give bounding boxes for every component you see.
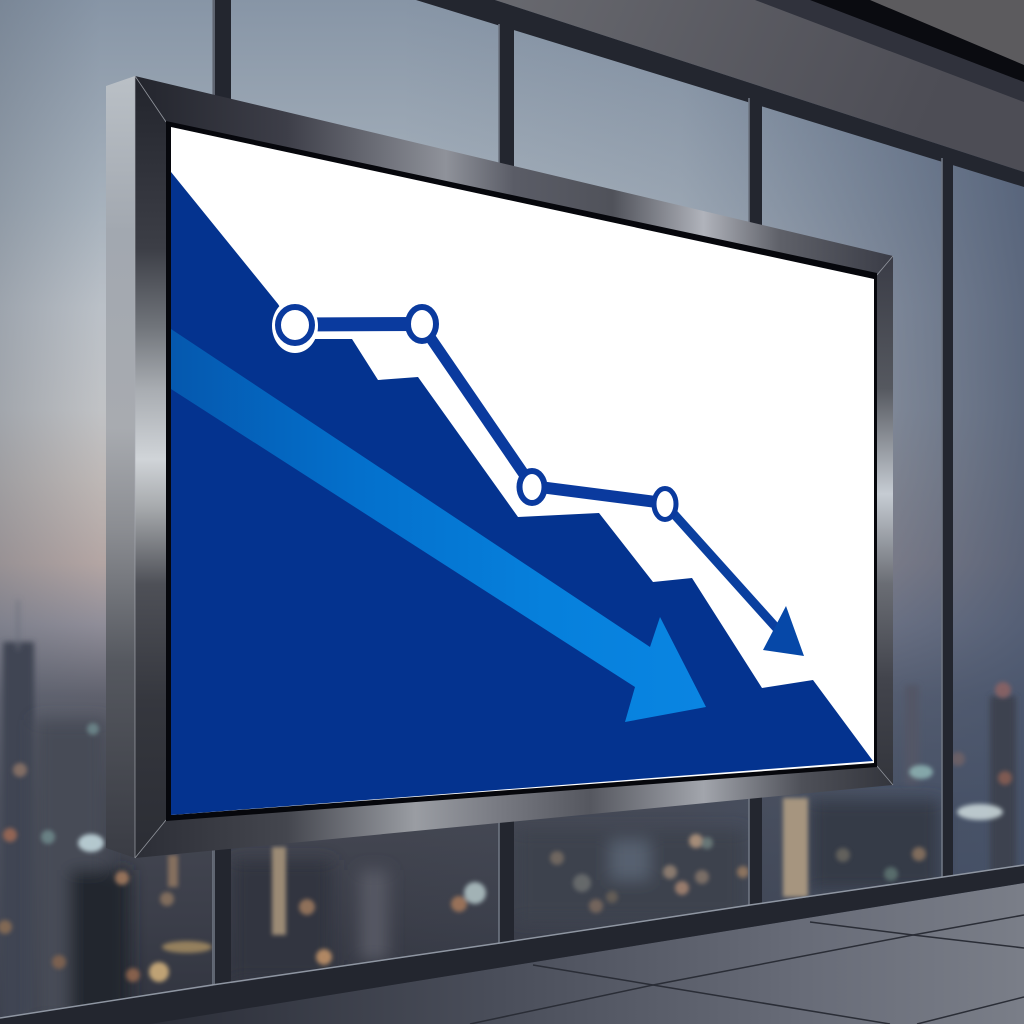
line chart with markers	[272, 299, 804, 656]
background: blurred city skyline	[3, 600, 1016, 1022]
marker 3	[520, 471, 544, 503]
screen background	[166, 121, 877, 821]
billboard	[106, 76, 893, 858]
background: city lights	[0, 682, 1012, 982]
light blue trend arrow	[171, 329, 706, 722]
marker 4	[654, 488, 676, 520]
billboard frame	[106, 76, 893, 858]
marker 1	[272, 299, 318, 353]
marker 2	[408, 307, 436, 341]
arrowhead	[763, 606, 804, 656]
dark blue descending area	[171, 172, 873, 815]
floor	[150, 883, 1024, 1024]
ceiling	[495, 0, 1024, 172]
